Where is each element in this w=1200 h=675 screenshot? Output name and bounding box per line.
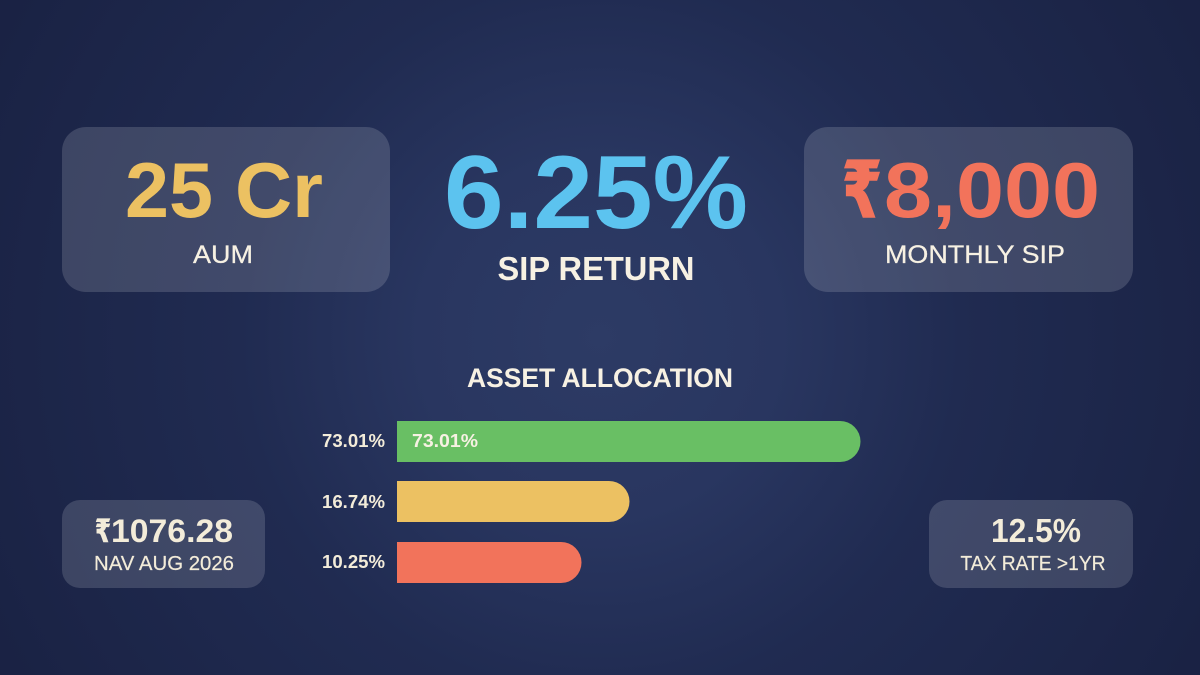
value: ₹1076.28: 1076.28 [111, 513, 233, 549]
value: ₹8,000: ₹ [842, 146, 882, 234]
bar row: 16.74% [322, 481, 629, 522]
bar row: 73.01%: 73.01% [322, 430, 385, 451]
bar row: 10.25%: 10.25% [322, 551, 385, 572]
bar row: 10.25% [322, 542, 582, 583]
label: MONTHLY SIP: MONTHLY SIP [885, 241, 1065, 269]
bar chart: asset allocation [322, 421, 860, 583]
label: TAX RATE >1YR: TAX RATE >1YR [960, 553, 1106, 575]
label: SIP RETURN: SIP RETURN [498, 250, 694, 287]
value: 6.25%: 6.25% [444, 135, 748, 251]
value: ₹1076.28: ₹ [95, 513, 111, 549]
value: 25 Cr: 25 Cr [125, 146, 323, 234]
card: AUM [62, 127, 390, 292]
label: AUM: AUM [193, 241, 253, 269]
bar row: 73.01% [322, 421, 860, 462]
headline stat: SIP return [444, 135, 748, 287]
value: ₹8,000: 8,000 [884, 146, 1100, 234]
value: 12.5%: 12.5% [991, 512, 1081, 549]
card: tax rate [929, 500, 1133, 588]
card: NAV [62, 500, 265, 588]
label: NAV AUG 2026: NAV AUG 2026 [94, 553, 234, 575]
bar row: 73.01%: 73.01% [412, 430, 478, 451]
bar row: 16.74%: 16.74% [322, 491, 385, 512]
card: monthly SIP [804, 127, 1133, 292]
heading: asset allocation: ASSET ALLOCATION [467, 363, 733, 393]
